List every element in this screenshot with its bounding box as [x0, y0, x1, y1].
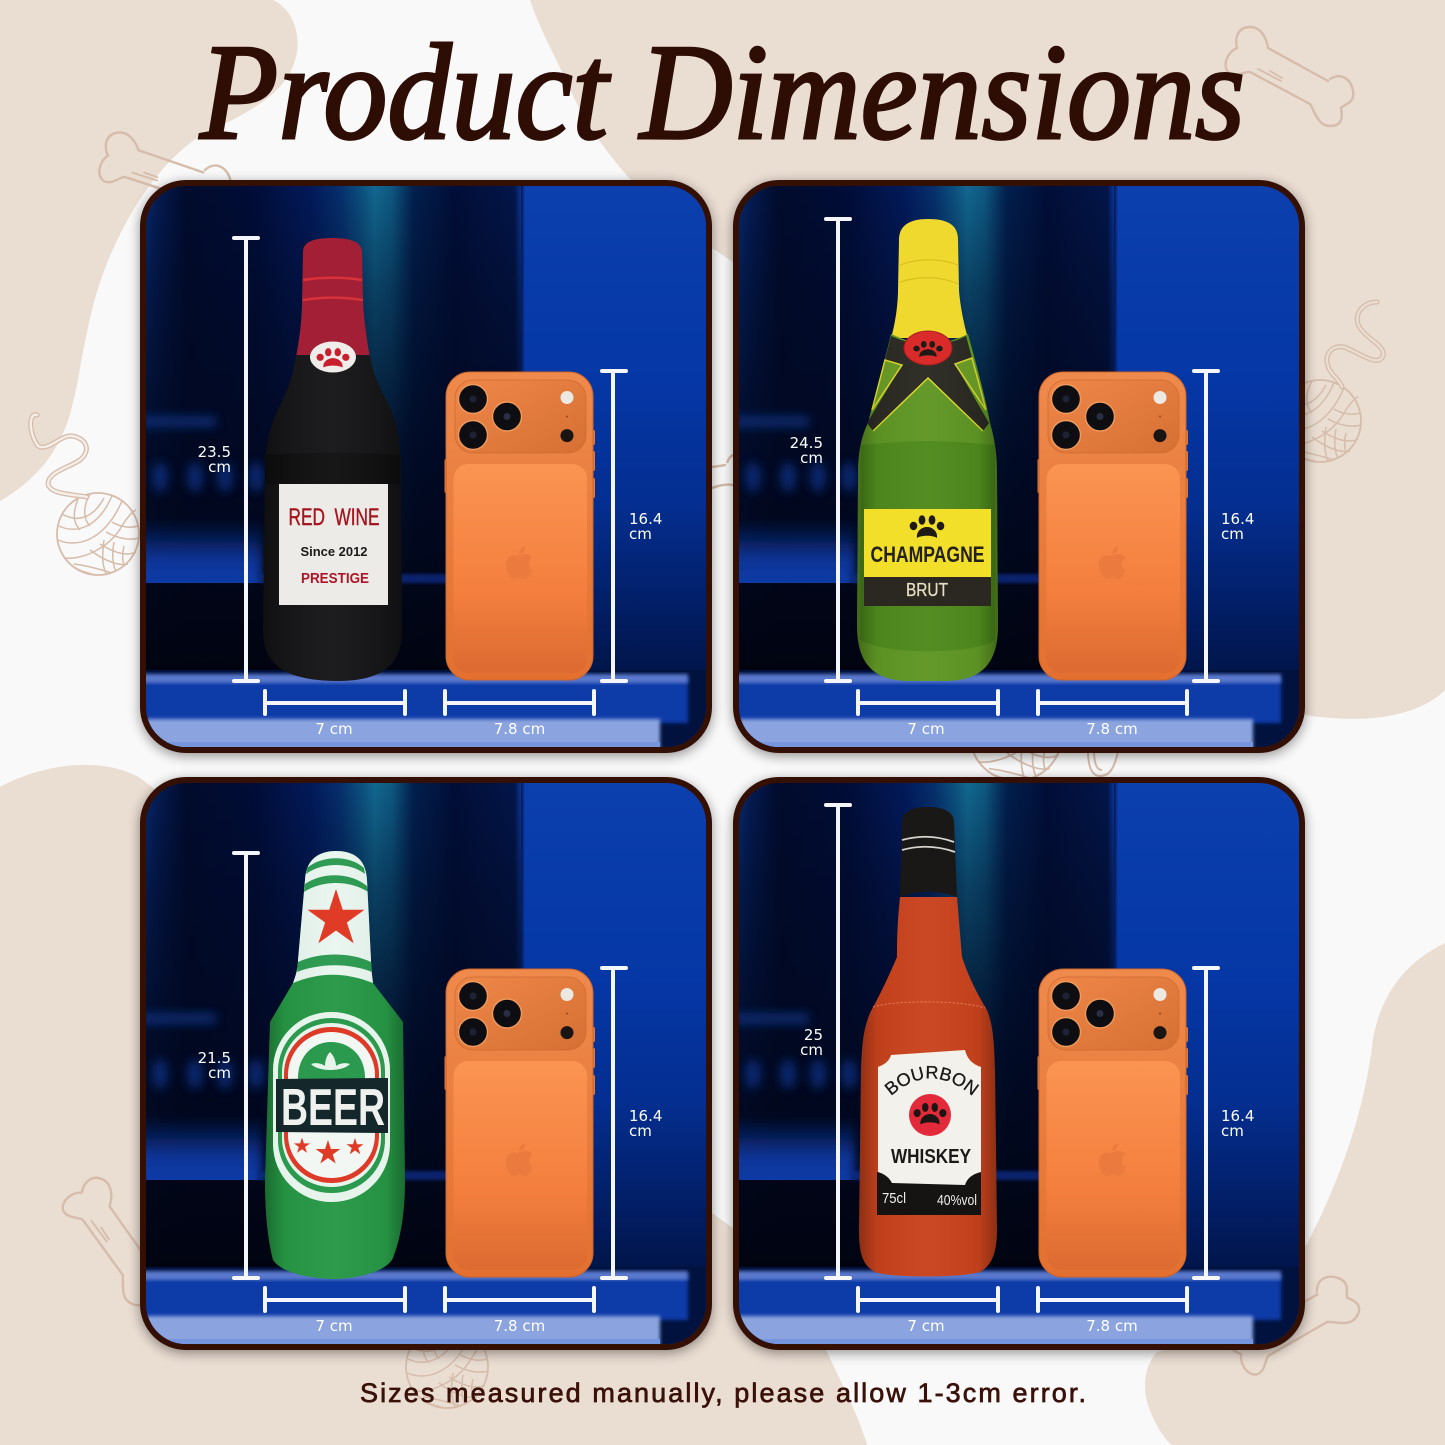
measurements: cm	[800, 449, 823, 467]
wine label: RED WINE	[288, 504, 380, 531]
measurements	[800, 1026, 1254, 1335]
bourbon label	[877, 1050, 981, 1215]
measurements: 7.8 cm	[1086, 720, 1138, 738]
phone	[1038, 372, 1188, 680]
dimension lines	[824, 803, 1220, 1313]
wine label	[279, 484, 388, 605]
panel: red wine	[130, 180, 712, 756]
measurements: 23.5	[198, 443, 231, 461]
bourbon label: WHISKEY	[891, 1146, 972, 1168]
measurements: 25	[804, 1026, 823, 1044]
measurements: 7 cm	[315, 720, 353, 738]
measurements	[198, 1049, 662, 1335]
measurements: 7.8 cm	[494, 720, 545, 738]
champagne label: CHAMPAGNE	[870, 542, 984, 567]
measurements: 16.4	[629, 510, 662, 528]
measurements: cm	[629, 525, 652, 543]
measurements: 24.5	[790, 434, 823, 452]
measurements	[198, 443, 662, 738]
measurements: 16.4	[629, 1107, 662, 1125]
measurements: 16.4	[1221, 1107, 1254, 1125]
measurements: cm	[800, 1041, 823, 1059]
bottle: beer	[265, 851, 405, 1279]
seal	[904, 331, 952, 365]
champagne label: BRUT	[906, 580, 948, 600]
bottle: bourbon	[859, 807, 997, 1276]
measurements: cm	[1221, 1122, 1244, 1140]
measurements: 7.8 cm	[1086, 1317, 1138, 1335]
bourbon label: 75cl	[882, 1190, 906, 1207]
measurements: 7.8 cm	[494, 1317, 545, 1335]
panel: champagne	[723, 180, 1305, 756]
panel: bourbon	[725, 772, 1313, 1361]
champagne label	[864, 509, 991, 606]
measurements: 16.4	[1221, 510, 1254, 528]
dimension lines	[232, 851, 628, 1313]
bottle: champagne	[857, 219, 998, 681]
measurements: cm	[1221, 525, 1244, 543]
phone	[444, 969, 595, 1277]
measurements: cm	[629, 1122, 652, 1140]
measurements: 7 cm	[315, 1317, 353, 1335]
footnote: Sizes measured manually, please allow 1-3cm error.	[360, 1378, 1086, 1408]
panel: beer	[130, 777, 712, 1353]
bourbon label: BOURBON	[884, 1066, 980, 1096]
measurements: 21.5	[198, 1049, 231, 1067]
beer label	[273, 1012, 390, 1202]
phone	[1038, 969, 1188, 1277]
measurements	[790, 434, 1254, 738]
measurements: cm	[208, 1064, 231, 1082]
title: Product Dimensions	[199, 16, 1245, 168]
bottle: red wine	[263, 238, 402, 681]
measurements: 7 cm	[907, 720, 945, 738]
dimension lines	[232, 236, 628, 716]
measurements: cm	[208, 458, 231, 476]
wine label: PRESTIGE	[301, 570, 369, 587]
dimension lines	[824, 217, 1220, 716]
bourbon label: 40%vol	[937, 1192, 977, 1209]
wine label: Since 2012	[300, 544, 368, 559]
phone	[444, 372, 595, 680]
measurements: 7 cm	[907, 1317, 945, 1335]
paw badge	[310, 342, 356, 372]
beer label: BEER	[281, 1079, 385, 1137]
